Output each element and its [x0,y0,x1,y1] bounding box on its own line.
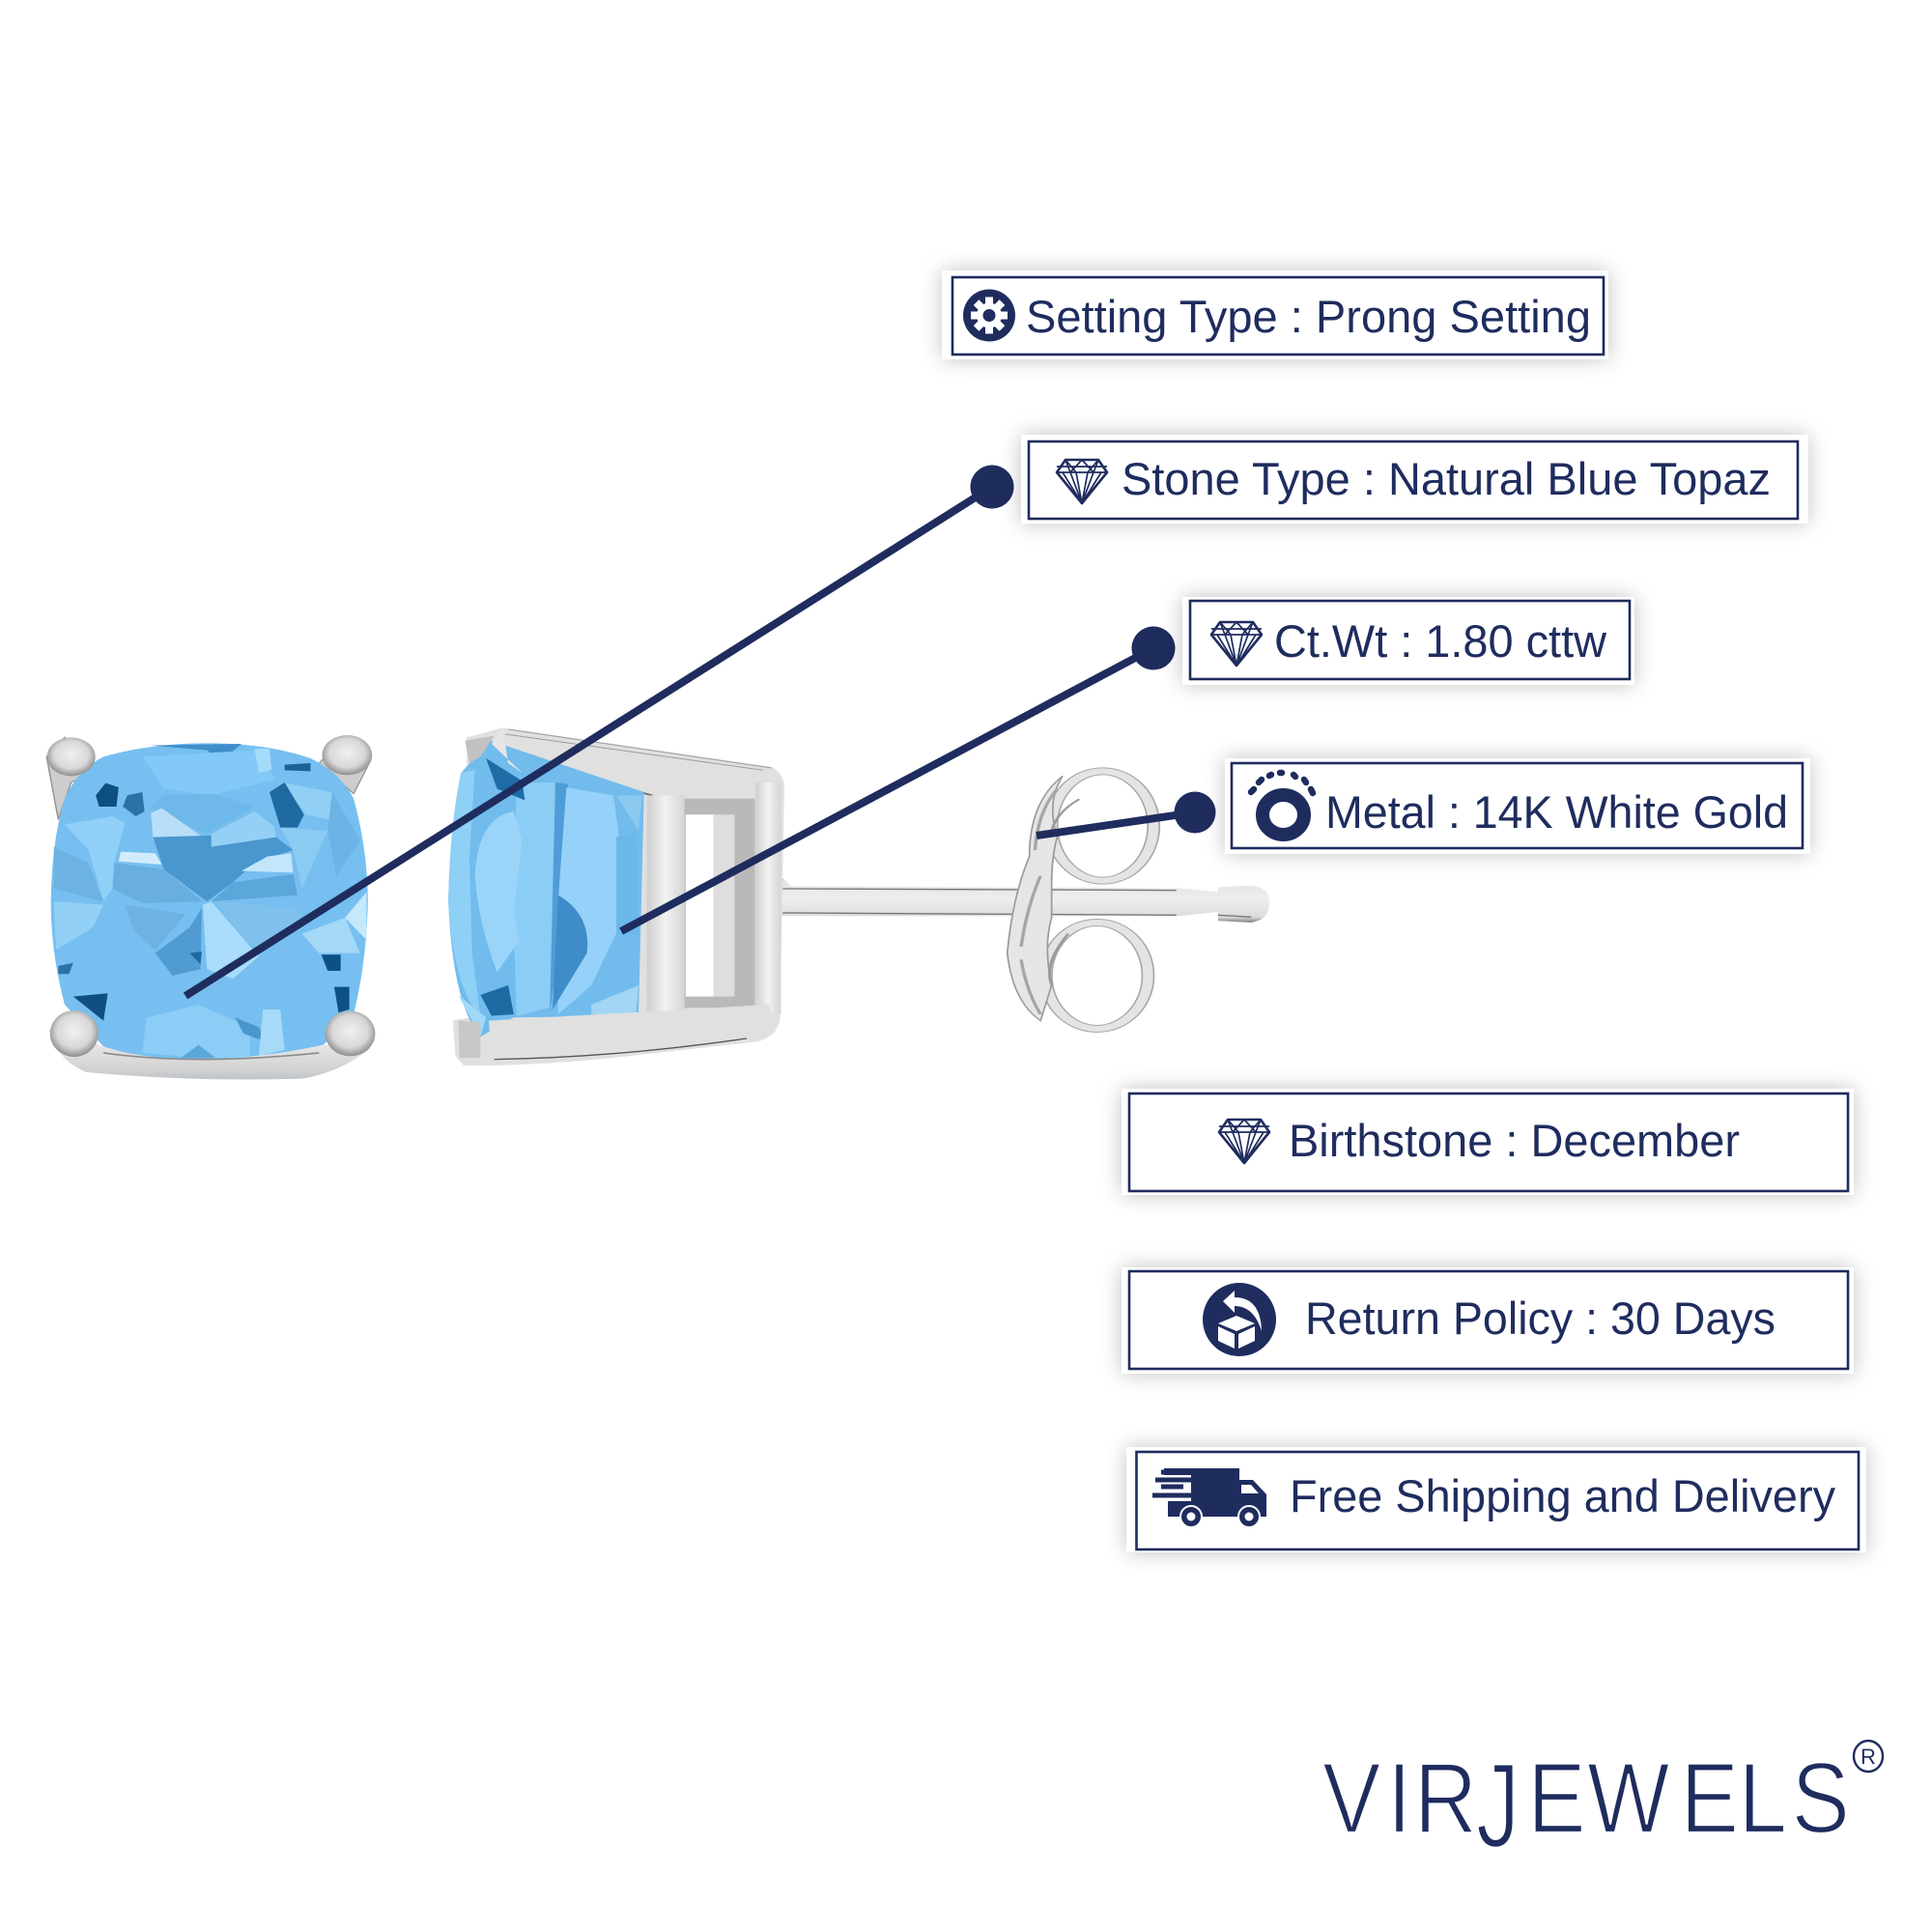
label: metal [1225,758,1810,854]
label: carat weight [1182,597,1634,685]
label: setting type [942,270,1608,359]
text: Ct.Wt : 1.80 cttw [1274,616,1607,668]
prong arms [46,737,371,819]
icon: diamond [1057,460,1107,503]
text: Stone Type : Natural Blue Topaz [1122,454,1771,505]
label: birthstone [1122,1089,1854,1195]
butterfly back [1052,771,1153,881]
icon: return box [1203,1283,1276,1356]
text: Setting Type : Prong Setting [1026,292,1591,343]
metal frame [453,727,784,1065]
text: Free Shipping and Delivery [1290,1471,1835,1522]
registered mark [1854,1741,1883,1772]
registered mark: R [1861,1745,1876,1769]
side gem [448,741,644,1037]
icon: diamond [1219,1120,1269,1163]
label: stone type [1021,435,1808,524]
front band [489,1005,776,1060]
line to metal [1037,792,1215,836]
icon: gear [963,290,1015,342]
label: free shipping [1126,1447,1866,1552]
gem body [51,743,368,1059]
earring: front view [46,735,375,1079]
text: Return Policy : 30 Days [1305,1293,1776,1345]
icon: truck [1152,1468,1266,1527]
text: Birthstone : December [1289,1116,1740,1167]
icon: diamond [1211,622,1262,666]
logo: VIR JEWELS [1322,1739,1883,1873]
line to stone type [185,466,1014,996]
post [780,876,1269,923]
icon: ring [1251,773,1313,835]
logo: VIR JEWELS: J [1476,1739,1520,1873]
earring: side view with post and butterfly back [448,727,1269,1065]
label: return policy [1122,1267,1854,1374]
bottom band [49,1031,371,1079]
line to carat weight [621,626,1175,931]
leader lines [185,466,1215,996]
logo: VIR JEWELS: EWELS [1527,1742,1850,1854]
text: Metal : 14K White Gold [1325,787,1788,838]
logo: VIR JEWELS: VIR [1322,1742,1477,1854]
